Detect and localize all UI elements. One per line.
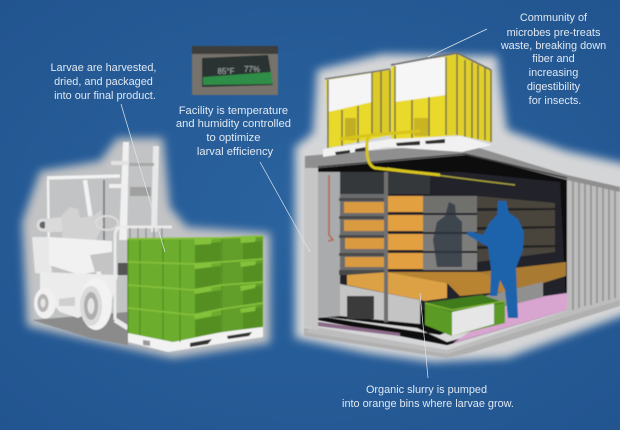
container roof [305,143,620,192]
pipe line in ceiling [387,168,515,185]
plinth right [480,282,543,310]
halo: container backdrop [295,54,620,362]
text: microbes: increasing [529,67,578,79]
text: larvae harvested: Larvae are harvested, [51,62,156,74]
crate handles [194,237,256,319]
forklift cab frame [47,176,120,275]
yellow IBC tank right [391,53,492,142]
pallet [128,326,263,352]
text: microbes: fiber and [532,53,575,65]
leader: microbes [428,29,487,57]
forklift front wheel [80,278,112,330]
text: microbes: for insects. [529,95,581,107]
forklift body [32,237,118,318]
lower orange bins [339,270,543,324]
pallets under tanks [323,136,492,157]
green crates [128,236,263,342]
display readout: 85°F [218,67,235,76]
crate stack right face [222,236,263,332]
shelf row 4 [339,253,477,270]
photo: temperature and humidity display [192,46,278,95]
front support pole [384,172,388,322]
forklift carriage [115,227,172,328]
yellow IBC tank left [325,69,390,148]
orange bin shelves [339,196,566,290]
text: larvae harvested: dried, and packaged [54,76,153,88]
red hose on left wall [328,175,333,241]
text: microbes: Community of [520,12,588,24]
plinth vent [347,296,374,319]
interior back wall [318,172,566,318]
halo: forklift backdrop [22,138,270,358]
illustration: forklift with green crates [32,142,263,354]
shelf row 2 [339,215,477,232]
leader: facility [260,162,310,252]
container base sill [304,297,620,358]
text: facility controlled: larval efficiency [197,146,274,158]
text: facility controlled: and humidity controlled [176,118,291,130]
right wall corrugated [567,176,620,311]
shelf row 1 [339,196,477,213]
leader: slurry [420,293,428,378]
forklift mast [109,142,159,240]
yellow hose [340,131,440,175]
crate recesses [195,242,221,337]
photo: temperature and humidity display: 77% [244,65,260,74]
left container post [304,156,318,330]
plinth below bins [340,284,420,324]
forklift shadow [32,312,172,354]
shelf row 3 [339,234,477,251]
container floor [318,293,567,343]
forklift rear wheel [34,288,56,318]
container interior [318,155,567,345]
illustration: shipping container [304,53,620,358]
rear shelves [477,196,555,262]
text: microbes: microbes pre-treats [507,27,601,39]
forklift seat and steering wheel [38,207,118,240]
crate stack left face [128,238,222,342]
leader: larvae [121,104,165,252]
crate rims [128,236,263,315]
white panel on crate [452,303,494,336]
crate dark verticals [128,238,222,342]
green crate on floor [425,295,505,336]
text: organic slurry: Organic slurry is pumped [366,384,487,396]
person in blue suit [466,201,524,318]
text: larvae harvested: into our final product. [54,90,156,102]
text: microbes: digestibility [527,81,581,93]
text: facility controlled: Facility is temperature [179,105,288,117]
base sill light band [304,293,620,354]
person shadow on wall [433,202,462,267]
text: organic slurry: into orange bins where larvae grow. [342,398,514,410]
text: microbes: waste, breaking down [500,40,606,52]
text: facility controlled: to optimize [206,132,260,144]
leader lines [121,29,487,378]
